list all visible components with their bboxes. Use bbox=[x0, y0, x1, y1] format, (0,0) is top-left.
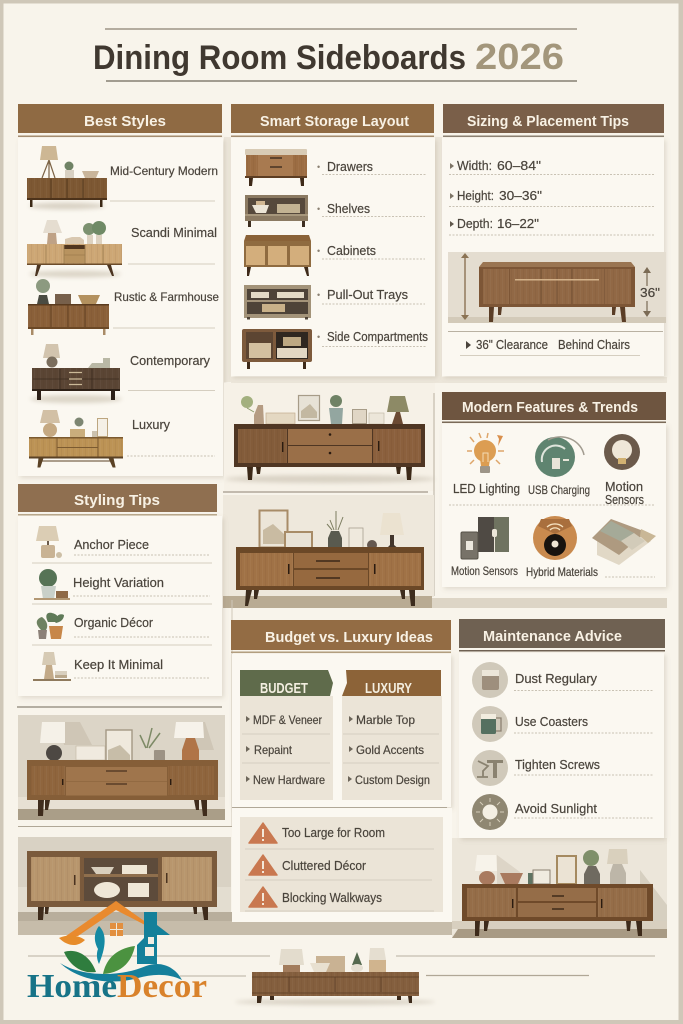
column: budget: MDF & Veneer bbox=[253, 713, 322, 727]
vignette: sideboard with plant and lamp bbox=[224, 383, 435, 491]
storage: pull-out trays bbox=[244, 285, 425, 320]
style: contemporary bbox=[30, 344, 215, 403]
feature: usb charging: USB Charging bbox=[528, 483, 590, 497]
heading: best styles: Best Styles bbox=[84, 113, 166, 130]
storage: cabinets: • bbox=[317, 246, 320, 256]
clearance tip bbox=[460, 337, 640, 356]
heading: sizing and placement tips: Sizing & Placement Tips bbox=[467, 113, 629, 130]
style: mid-century modern bbox=[27, 146, 218, 210]
size: height: Height: bbox=[457, 188, 494, 203]
storage: shelves: • bbox=[317, 204, 320, 214]
heading: modern features and trends bbox=[442, 392, 666, 423]
feature: led lighting bbox=[453, 433, 520, 496]
panel: maintenance advice bbox=[459, 619, 665, 838]
warning: too large bbox=[245, 823, 434, 849]
feature: motion sensors switch: Motion Sensors bbox=[451, 564, 518, 578]
heading: smart storage layout bbox=[231, 104, 434, 137]
storage: side compartments: Side Compartments bbox=[327, 329, 428, 344]
title: Dining Room Sideboards bbox=[93, 39, 466, 77]
size: height bbox=[449, 188, 654, 206]
advice: dust regularly: Dust Regulary bbox=[515, 671, 597, 686]
storage: side compartments: • bbox=[317, 332, 320, 342]
column: budget: BUDGET bbox=[260, 681, 308, 697]
wordmark: Decor bbox=[117, 968, 207, 1005]
heading: best styles bbox=[18, 104, 222, 137]
heading: styling tips bbox=[18, 484, 217, 516]
advice: use coasters: Use Coasters bbox=[515, 714, 588, 729]
warning: cluttered decor bbox=[245, 855, 432, 880]
size: width: Width: bbox=[457, 158, 492, 173]
column: luxury: Gold Accents bbox=[356, 743, 424, 757]
column: luxury: Custom Design bbox=[355, 773, 430, 787]
wordmark: Home bbox=[27, 968, 117, 1005]
storage: pull-out trays: • bbox=[317, 290, 320, 300]
tip: height variation: Height Variation bbox=[73, 575, 164, 590]
panel: budget vs luxury ideas bbox=[231, 620, 451, 807]
panel: styling tips bbox=[18, 484, 222, 696]
clearance tip: Behind Chairs bbox=[558, 337, 630, 352]
tip: keep it minimal bbox=[33, 652, 210, 681]
heading: maintenance advice: Maintenance Advice bbox=[483, 628, 622, 645]
diagram: sideboard dimensions bbox=[448, 252, 666, 323]
feature: led lighting: LED Lighting bbox=[453, 481, 520, 496]
advice: dust regularly bbox=[472, 662, 654, 698]
size: width bbox=[449, 158, 654, 174]
style: scandi minimal bbox=[27, 220, 217, 278]
style: scandi minimal: Scandi Minimal bbox=[131, 225, 217, 240]
advice: use coasters bbox=[472, 706, 654, 742]
arrow: 36 inch height bbox=[640, 267, 660, 317]
storage: shelves: Shelves bbox=[327, 201, 370, 216]
column: budget bbox=[240, 670, 333, 800]
heading: modern features and trends: Modern Features & Trends bbox=[462, 399, 638, 416]
icon: house and leaves bbox=[59, 901, 182, 982]
style: rustic and farmhouse bbox=[28, 279, 219, 335]
column: luxury: LUXURY bbox=[365, 681, 412, 697]
feature: motion sensors switch bbox=[451, 517, 518, 578]
column: budget: New Hardware bbox=[253, 773, 325, 787]
heading: smart storage layout: Smart Storage Layout bbox=[260, 113, 409, 130]
heading: budget vs luxury bbox=[231, 620, 451, 653]
tip: anchor piece: Anchor Piece bbox=[74, 537, 149, 552]
arrow: overall height bbox=[461, 253, 469, 320]
size: depth: Depth: bbox=[457, 216, 493, 231]
feature: hybrid materials circle: Hybrid Materials bbox=[526, 565, 598, 579]
clearance tip: 36" Clearance bbox=[476, 337, 548, 352]
warning: blocking walkways bbox=[245, 887, 434, 911]
tip: organic decor bbox=[37, 613, 210, 639]
title: 2026 bbox=[475, 36, 564, 77]
advice: tighten screws bbox=[472, 750, 654, 786]
wordmark bbox=[27, 968, 207, 1005]
warning: blocking walkways: Blocking Walkways bbox=[282, 890, 382, 905]
column: luxury: Marble Top bbox=[356, 713, 415, 727]
arrow: 36 inch height: 36" bbox=[640, 285, 660, 300]
footer rules bbox=[28, 956, 655, 976]
advice: tighten screws: Tighten Screws bbox=[515, 757, 600, 772]
feature: motion sensors ceiling bbox=[604, 434, 644, 507]
vignette: sideboard with lamps and bowl bbox=[452, 838, 667, 938]
feature: usb charging bbox=[528, 437, 590, 497]
advice: avoid sunlight: Avoid Sunlight bbox=[515, 801, 597, 816]
panel: modern features and trends bbox=[442, 392, 666, 587]
storage: cabinets: Cabinets bbox=[327, 243, 376, 258]
storage: drawers bbox=[245, 149, 427, 186]
column: budget: Repaint bbox=[254, 743, 293, 757]
panel: smart storage layout bbox=[231, 104, 435, 376]
panel: mistakes to avoid bbox=[232, 808, 452, 922]
heading: budget vs luxury: Budget vs. Luxury Ideas bbox=[265, 629, 433, 646]
size: height: 30–36" bbox=[499, 188, 542, 203]
heading: styling tips: Styling Tips bbox=[74, 492, 160, 509]
feature: hybrid materials circle bbox=[526, 516, 598, 579]
warning: too large: Too Large for Room bbox=[282, 825, 385, 840]
tip: anchor piece bbox=[36, 526, 210, 558]
panel: best styles bbox=[18, 104, 223, 476]
feature: motion sensors ceiling: Motion bbox=[605, 479, 643, 494]
style: mid-century modern: Mid-Century Modern bbox=[110, 164, 218, 178]
storage: side compartments bbox=[242, 329, 428, 369]
heading: maintenance advice bbox=[459, 619, 665, 652]
tip: keep it minimal: Keep It Minimal bbox=[74, 657, 163, 672]
storage: drawers: Drawers bbox=[327, 159, 373, 174]
footer sideboard bbox=[235, 948, 435, 1005]
style: luxury bbox=[29, 410, 215, 467]
feature: material box bbox=[592, 519, 656, 577]
vignette: open shelf sideboard bbox=[18, 837, 452, 935]
storage: cabinets bbox=[244, 235, 425, 276]
tip: organic decor: Organic Décor bbox=[74, 615, 154, 630]
title bbox=[93, 29, 577, 81]
storage: pull-out trays: Pull-Out Trays bbox=[327, 287, 408, 302]
warning: cluttered decor: Cluttered Décor bbox=[282, 858, 367, 873]
size: depth: 16–22" bbox=[497, 216, 539, 231]
style: rustic and farmhouse: Rustic & Farmhouse bbox=[114, 290, 219, 304]
style: luxury: Luxury bbox=[132, 417, 170, 432]
logo: HomeDecor bbox=[27, 901, 207, 1005]
feature: motion sensors ceiling: Sensors bbox=[605, 492, 644, 507]
storage: drawers: • bbox=[317, 162, 320, 172]
column: luxury bbox=[342, 670, 442, 800]
heading: sizing and placement tips bbox=[443, 104, 664, 137]
style: contemporary: Contemporary bbox=[130, 353, 210, 368]
advice: avoid sunlight bbox=[472, 794, 654, 830]
vignette: sideboard with two lamps bbox=[17, 600, 232, 826]
panel: sizing and placement tips bbox=[442, 104, 666, 376]
storage: shelves bbox=[245, 195, 425, 227]
size: depth bbox=[449, 216, 654, 235]
tip: height variation bbox=[34, 569, 210, 600]
vignette: sideboard with frames and lamp bbox=[223, 393, 667, 608]
size: width: 60–84" bbox=[497, 158, 541, 173]
